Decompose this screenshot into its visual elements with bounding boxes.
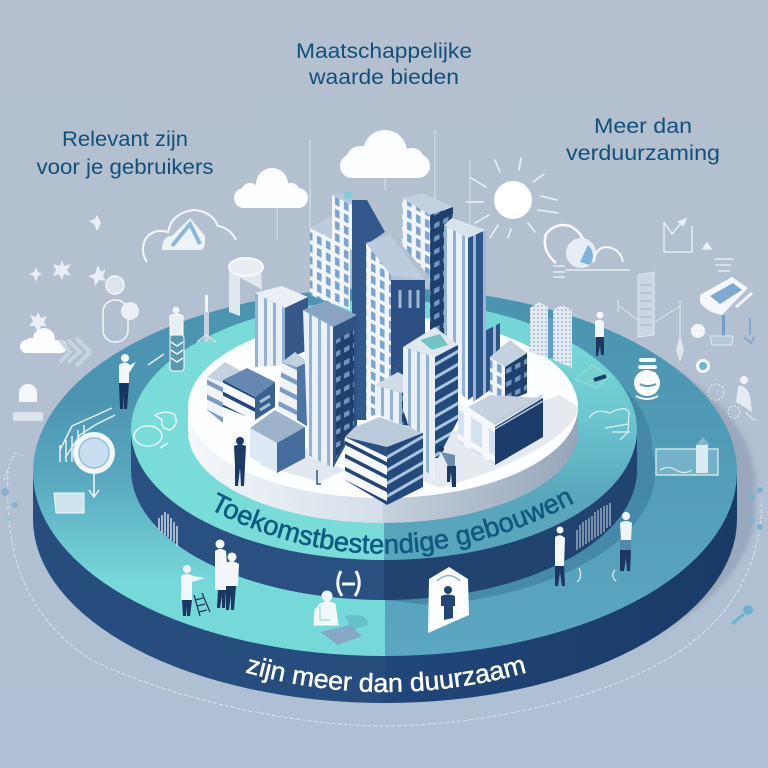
person with ladder — [181, 565, 210, 616]
dashed orbit line — [8, 470, 762, 726]
icon: capsule outline — [103, 276, 139, 342]
building: box front left — [250, 410, 305, 473]
two persons, lower left — [215, 540, 239, 610]
text: Toekomstbestendige gebouwen — [215, 492, 574, 557]
building: far left small — [207, 362, 243, 423]
icon: chart box on ring, right — [656, 437, 718, 475]
person, far lower right — [620, 512, 632, 571]
white platform top — [188, 316, 578, 498]
icon: frame with graph — [664, 219, 711, 252]
icon: gear with arrow — [73, 432, 115, 497]
icon: tablet device — [700, 277, 754, 345]
icon: cursor marks near people — [577, 568, 616, 582]
icon: H emblem — [338, 571, 359, 596]
icon: bar chart on dark side — [577, 503, 610, 550]
white platform side — [188, 407, 578, 523]
title: Relevant zijn voor je gebruikers: Relevant zijn — [62, 128, 188, 151]
icon: person bust — [13, 384, 43, 421]
icon: tablet on ring — [54, 493, 84, 513]
twin towers, right back — [530, 302, 572, 368]
icon: sun — [466, 158, 558, 238]
tower: back right — [402, 193, 453, 340]
building: front tall with dark side — [303, 301, 357, 468]
outer tier surface — [33, 288, 737, 656]
icon: spiral pedestal — [634, 360, 660, 399]
icons: dots — [691, 324, 710, 373]
tower: central with light roof — [366, 235, 425, 420]
building: left mid — [255, 286, 308, 367]
icon: mast — [197, 295, 216, 342]
person on outer ring, left — [119, 354, 136, 409]
title: Maatschappelijke waarde bieden: Maatschappelijke — [296, 40, 472, 63]
icon: dots far right — [748, 487, 763, 530]
tower: right tall — [444, 218, 486, 400]
building: small middle — [375, 372, 420, 427]
title: Meer dan verduurzaming: verduurzaming — [566, 142, 720, 165]
building: striped — [223, 368, 275, 420]
person thinking, upper right — [595, 312, 604, 356]
tower: tall central blue — [332, 191, 385, 420]
small post on platform — [317, 470, 321, 484]
person bending on platform — [438, 446, 456, 487]
icon: magnifier lower right — [732, 605, 753, 624]
icon: bar waves on dark side — [159, 512, 177, 546]
icon: chat bubbles on mid ring — [134, 412, 176, 448]
icon: dotted grid — [714, 258, 734, 272]
icon: outlined cloud with house, left — [143, 210, 236, 262]
icon: cylinder tank — [229, 258, 263, 316]
icon: trend line, lower left — [1, 452, 22, 521]
building: narrow left — [278, 352, 308, 427]
thin arrows from the clouds — [277, 130, 470, 240]
icon: chart lines on ring, left — [60, 354, 164, 462]
subtitle: zijn meer dan duurzaam — [244, 672, 528, 692]
building: front centre striped — [345, 417, 423, 505]
icon: chevrons — [60, 338, 90, 366]
stacked disc platform — [33, 288, 737, 703]
outer tier side — [33, 472, 737, 703]
person on platform, left — [234, 437, 246, 486]
icon: cloud centre — [340, 130, 430, 178]
icon: document on mid ring, right — [575, 365, 610, 388]
icon: cloud lower left — [20, 328, 67, 353]
icon: cloud left — [234, 168, 308, 208]
text: zijn meer dan duurzaam — [246, 658, 526, 692]
tower: right lower dark — [473, 323, 500, 402]
person with spiral stand — [170, 306, 184, 371]
disc drop shadow — [500, 350, 756, 672]
icon: ruler tower — [618, 272, 684, 362]
middle tier shadow — [385, 375, 655, 605]
middle tier surface — [131, 300, 637, 560]
title: Toekomstbestendige gebouwen — [208, 502, 576, 554]
icon: outlined shape on mid ring, right — [589, 409, 630, 440]
icon: outlined clouds right — [545, 225, 630, 277]
person, lower right with phone — [555, 526, 565, 586]
title: Relevant zijn voor je gebruikers: voor je gebruikers — [36, 156, 214, 179]
tower: back left — [310, 215, 352, 310]
title: Meer dan verduurzaming: Meer dan — [594, 115, 692, 138]
building: right small — [490, 340, 527, 402]
person seated with laptop — [314, 590, 368, 645]
icon: house card with person — [428, 567, 469, 633]
middle tier side — [131, 430, 637, 600]
person and plants, far right — [708, 376, 756, 420]
decorative stars — [29, 215, 106, 332]
title: Maatschappelijke waarde bieden: waarde bieden — [308, 66, 459, 89]
building: low wide right — [458, 395, 543, 465]
building: right middle with roof terrace — [403, 327, 458, 480]
